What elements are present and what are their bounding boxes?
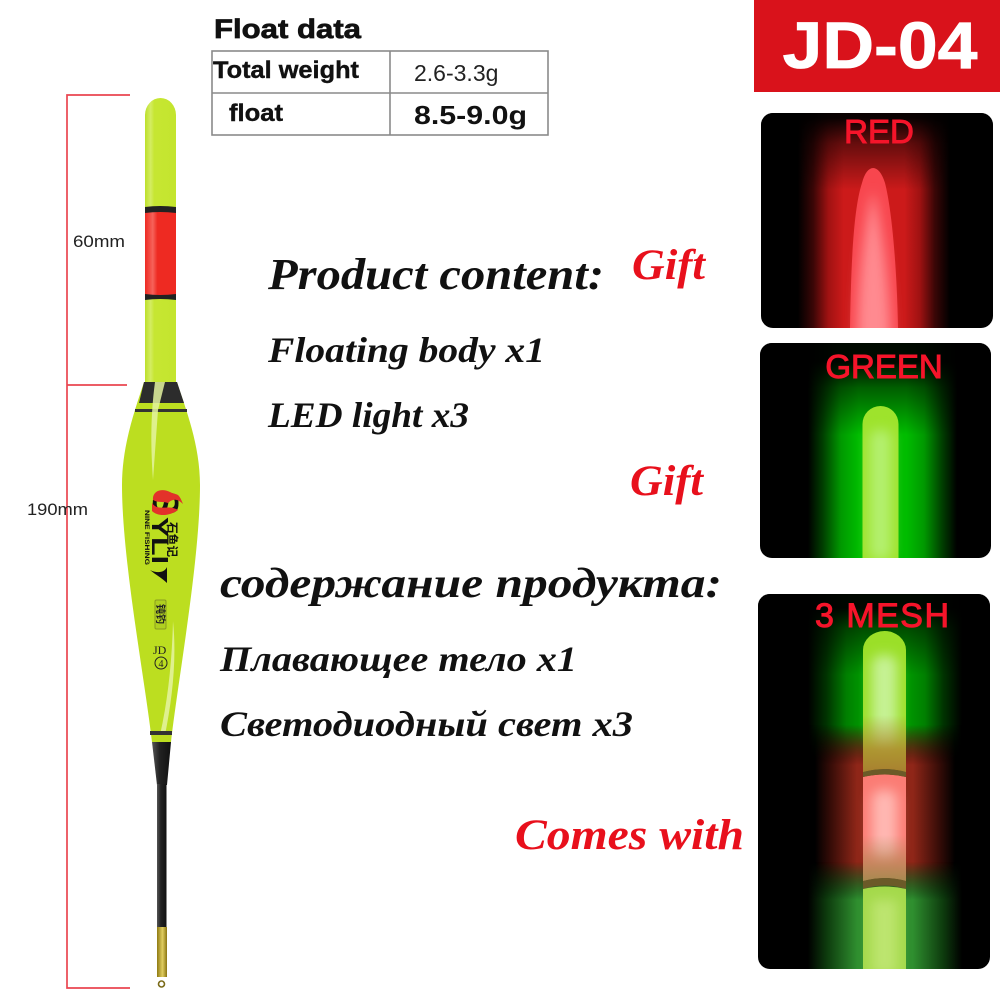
label: 60mm: 60mm — [73, 232, 125, 251]
body highlights — [151, 382, 165, 480]
float data table: float — [229, 100, 283, 127]
green tube — [862, 406, 898, 558]
label GREEN: GREEN — [825, 348, 943, 385]
panel: green light — [760, 343, 991, 560]
float data title: Float data — [214, 14, 362, 44]
model text JD 4 — [153, 643, 167, 670]
russian line 2: Светодиодный свет x3 — [220, 704, 633, 744]
upper tube — [863, 631, 906, 772]
model badge — [154, 600, 169, 629]
panel: 3 mesh light — [758, 594, 990, 975]
lower tube — [863, 886, 906, 969]
green glow — [810, 343, 955, 558]
fishing float — [122, 98, 200, 987]
black taper — [152, 742, 171, 785]
LED light line: LED light x3 — [267, 395, 469, 435]
label: 190mm: 190mm — [27, 500, 88, 519]
logo: NINE FISHING — [143, 510, 150, 565]
float antenna tip — [145, 98, 176, 382]
label 3 MESH: 3 MESH — [815, 597, 949, 635]
dimension bracket — [67, 95, 130, 988]
gift label 1: Gift — [632, 242, 707, 289]
logo — [143, 490, 186, 583]
black rings — [145, 206, 176, 300]
lower black ring — [150, 731, 172, 735]
red glow middle — [820, 728, 950, 763]
logo: YLI — [147, 517, 173, 564]
eyelet — [158, 981, 164, 987]
float data table: 2.6-3.3g — [414, 60, 498, 86]
brass end — [157, 927, 167, 977]
comes with label: Comes with — [515, 812, 744, 859]
stem — [157, 784, 166, 927]
logo: 石鱼记 — [164, 522, 181, 557]
float data table: 8.5-9.0g — [414, 100, 527, 130]
green glow top — [811, 608, 959, 756]
model text JD 4: 4 — [158, 659, 164, 670]
model badge: 钝钓 — [154, 604, 169, 624]
label RED: RED — [844, 113, 914, 150]
red tube — [850, 168, 898, 328]
panel: red light — [761, 113, 993, 340]
logo: S — [145, 491, 186, 515]
model banner: JD-04 — [782, 8, 978, 82]
red section — [863, 774, 906, 881]
product content heading: Product content: — [267, 250, 604, 299]
float body — [122, 382, 200, 742]
russian line 1: Плавающее тело x1 — [219, 639, 577, 679]
body black collar — [139, 382, 184, 403]
green glow bottom — [824, 864, 946, 898]
russian heading: содержание продукта: — [220, 561, 722, 607]
red glow — [800, 113, 948, 328]
model text JD 4: JD — [153, 643, 167, 657]
gift label 2: Gift — [630, 458, 705, 505]
model banner — [754, 0, 1000, 92]
floating body line: Floating body x1 — [267, 330, 545, 370]
red antenna band — [145, 210, 176, 297]
float data table — [212, 51, 548, 135]
float data table: Total weight — [213, 57, 359, 84]
black band separators — [863, 769, 906, 889]
